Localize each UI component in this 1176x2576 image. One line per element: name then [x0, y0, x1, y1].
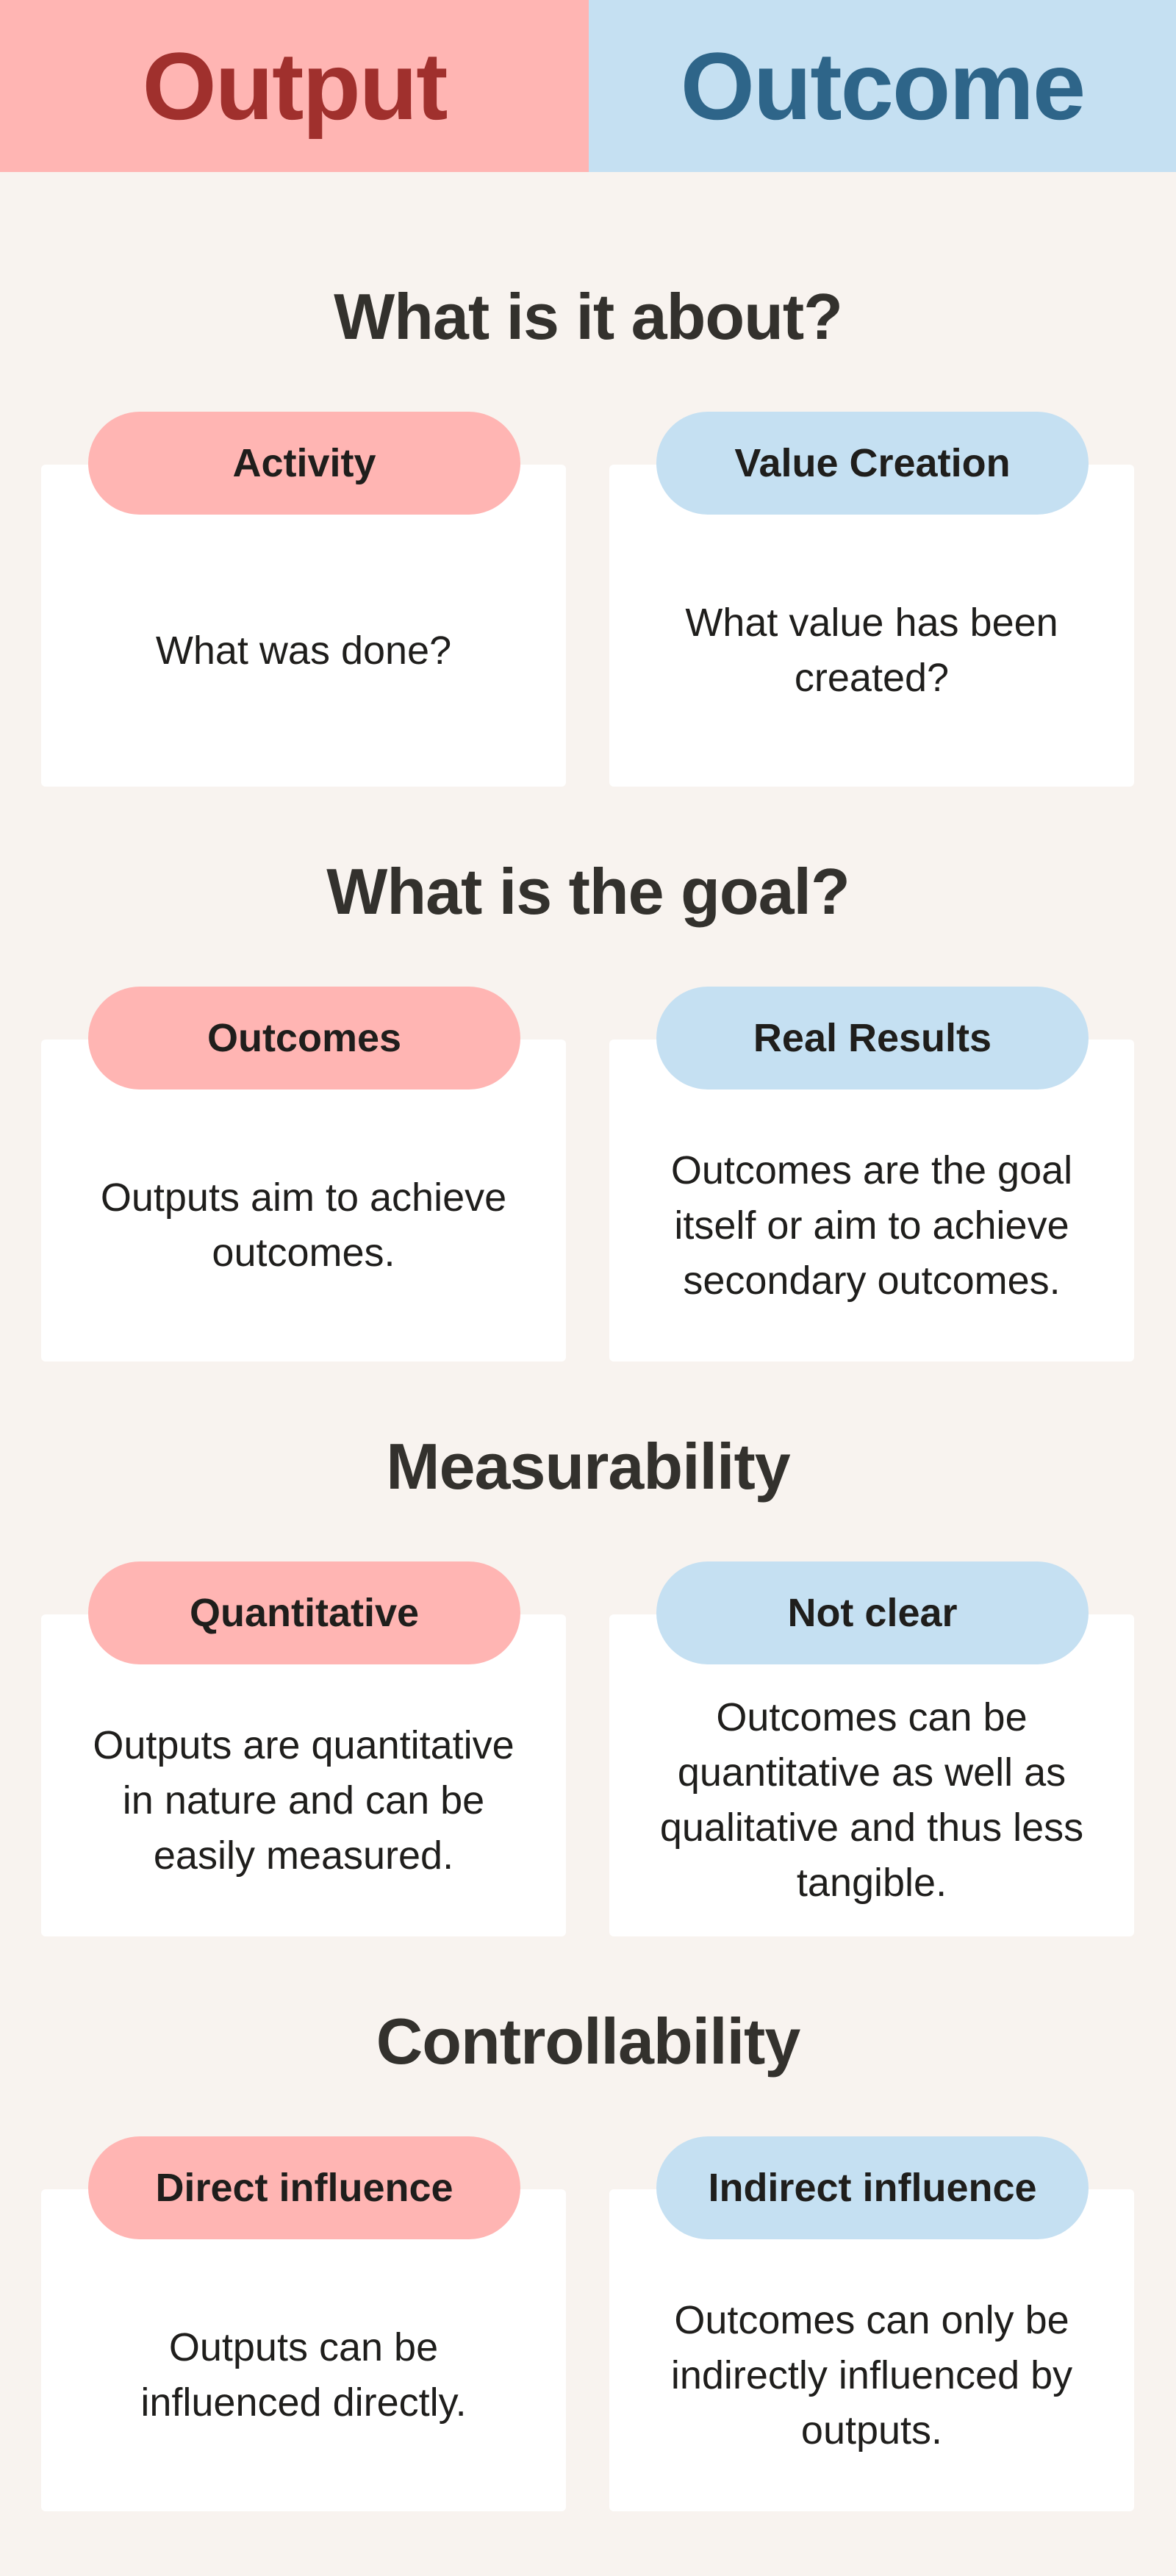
text: outcomes indirect: [671, 2298, 1072, 2452]
text: what was done: What was done?: [156, 628, 451, 672]
header: Outcome: [589, 0, 1176, 172]
card: outcome goal: [609, 1040, 1134, 1362]
pill: Outcomes: [88, 987, 520, 1090]
header: Output: Output: [143, 32, 446, 140]
pill: Direct influence: [88, 2136, 520, 2239]
header: Outcome: Outcome: [681, 32, 1084, 140]
text: outputs direct: Outputs can be: [169, 2325, 438, 2369]
text: outcomes indirect: indirectly influenced by: [671, 2353, 1072, 2397]
pill: Quantitative: Quantitative: [190, 1591, 419, 1635]
heading: What is the goal?: What is the goal?: [326, 855, 850, 928]
text: outputs quantitative: Outputs are quantitative: [93, 1723, 514, 1767]
heading: Controllability: Controllability: [376, 2005, 800, 2078]
text: outputs quantitative: easily measured.: [154, 1833, 453, 1878]
text: outcomes qualitative: quantitative as well as: [678, 1750, 1066, 1795]
text: outputs quantitative: [93, 1723, 514, 1878]
text: outcomes goal: [671, 1148, 1072, 1303]
card: outcome measurability: [609, 1614, 1134, 1936]
text: what value created: created?: [795, 656, 949, 700]
card: outcome control: [609, 2189, 1134, 2511]
pill: Value Creation: [656, 412, 1089, 515]
pill: Quantitative: [88, 1561, 520, 1664]
text: outcomes qualitative: [660, 1695, 1083, 1905]
text: outcomes qualitative: tangible.: [797, 1861, 947, 1905]
pill: Direct influence: Direct influence: [155, 2166, 453, 2210]
text: what value created: [685, 601, 1058, 700]
pill: Real Results: [656, 987, 1089, 1090]
pill: Indirect influence: [656, 2136, 1089, 2239]
text: outputs quantitative: in nature and can be: [123, 1778, 484, 1822]
text: outputs aim: [101, 1176, 506, 1275]
card: outcome value creation: [609, 465, 1134, 787]
card: output measurability: [41, 1614, 566, 1936]
text: what value created: What value has been: [685, 601, 1058, 645]
text: outcomes indirect: Outcomes can only be: [674, 2298, 1069, 2342]
header: Output: [0, 0, 589, 172]
card: output control: [41, 2189, 566, 2511]
pill: Outcomes: Outcomes: [207, 1016, 401, 1060]
text: outputs direct: [140, 2325, 467, 2425]
text: outcomes goal: Outcomes are the goal: [671, 1148, 1072, 1192]
text: outputs direct: influenced directly.: [140, 2380, 467, 2425]
pill: Indirect influence: Indirect influence: [708, 2166, 1037, 2210]
pill: Activity: Activity: [232, 441, 376, 485]
text: outputs aim: Outputs aim to achieve: [101, 1176, 506, 1220]
text: outcomes indirect: outputs.: [801, 2408, 942, 2452]
text: outcomes qualitative: Outcomes can be: [716, 1695, 1028, 1739]
text: outcomes qualitative: qualitative and thus less: [660, 1806, 1083, 1850]
pill: Not clear: Not clear: [787, 1591, 958, 1635]
card: output activity: [41, 465, 566, 787]
pill: Not clear: [656, 1561, 1089, 1664]
pill: Real Results: Real Results: [753, 1016, 992, 1060]
text: outcomes goal: secondary outcomes.: [683, 1259, 1061, 1303]
text: outcomes goal: itself or aim to achieve: [674, 1203, 1069, 1247]
pill: Activity: [88, 412, 520, 515]
card: output goal: [41, 1040, 566, 1362]
heading: What is it about?: What is it about?: [334, 280, 842, 353]
heading: Measurability: Measurability: [386, 1430, 790, 1503]
text: outputs aim: outcomes.: [212, 1231, 395, 1275]
pill: Value Creation: Value Creation: [734, 441, 1011, 485]
